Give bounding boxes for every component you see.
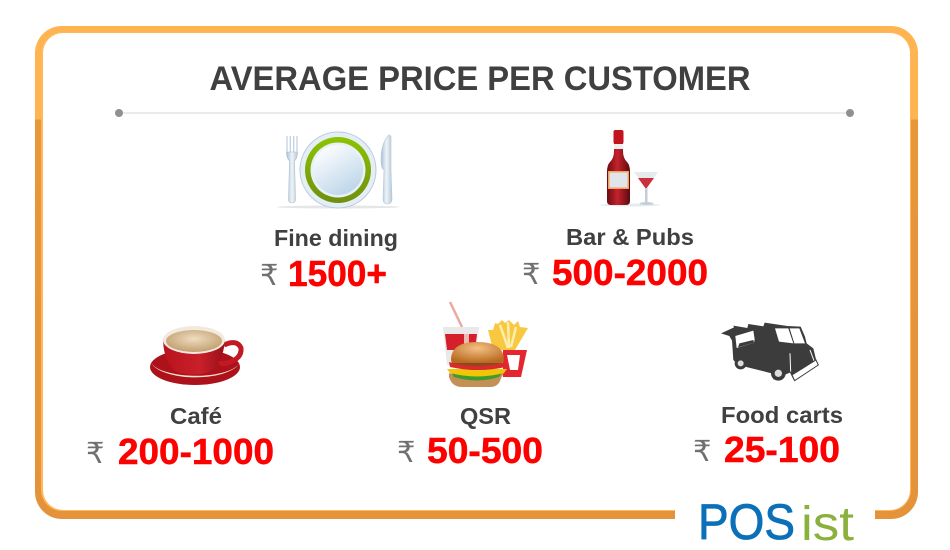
price: cafe: ₹ (86, 436, 104, 470)
title divider (115, 109, 854, 117)
heading: bar and pubs: Bar & Pubs (566, 224, 694, 250)
price: fine dining: ₹ (260, 258, 278, 292)
icon: burger, drink and fries (443, 302, 528, 387)
price: qsr: 50-500 (427, 430, 543, 471)
heading: food carts: Food carts (721, 402, 843, 428)
heading: qsr: QSR (460, 403, 511, 429)
icon: wine bottle and glass (600, 130, 660, 206)
price: fine dining: 1500+ (288, 253, 387, 294)
price: bar and pubs: 500-2000 (552, 252, 708, 293)
icon: plate and cutlery (276, 132, 400, 208)
logo: POSist (698, 494, 854, 550)
price: cafe: 200-1000 (118, 431, 274, 472)
price: food carts: ₹ (693, 434, 711, 468)
price: food carts: 25-100 (724, 429, 840, 470)
logo: POSist: ist (801, 498, 854, 550)
icon: food truck (721, 323, 818, 381)
icon: coffee cup (150, 326, 241, 385)
price: qsr: ₹ (397, 435, 415, 469)
title: AVERAGE PRICE PER CUSTOMER (210, 60, 751, 98)
logo gap in frame (675, 496, 875, 526)
heading: fine dining: Fine dining (274, 225, 398, 251)
logo: POSist: POS (698, 494, 795, 550)
heading: cafe: Café (170, 403, 222, 429)
price: bar and pubs: ₹ (522, 257, 540, 291)
